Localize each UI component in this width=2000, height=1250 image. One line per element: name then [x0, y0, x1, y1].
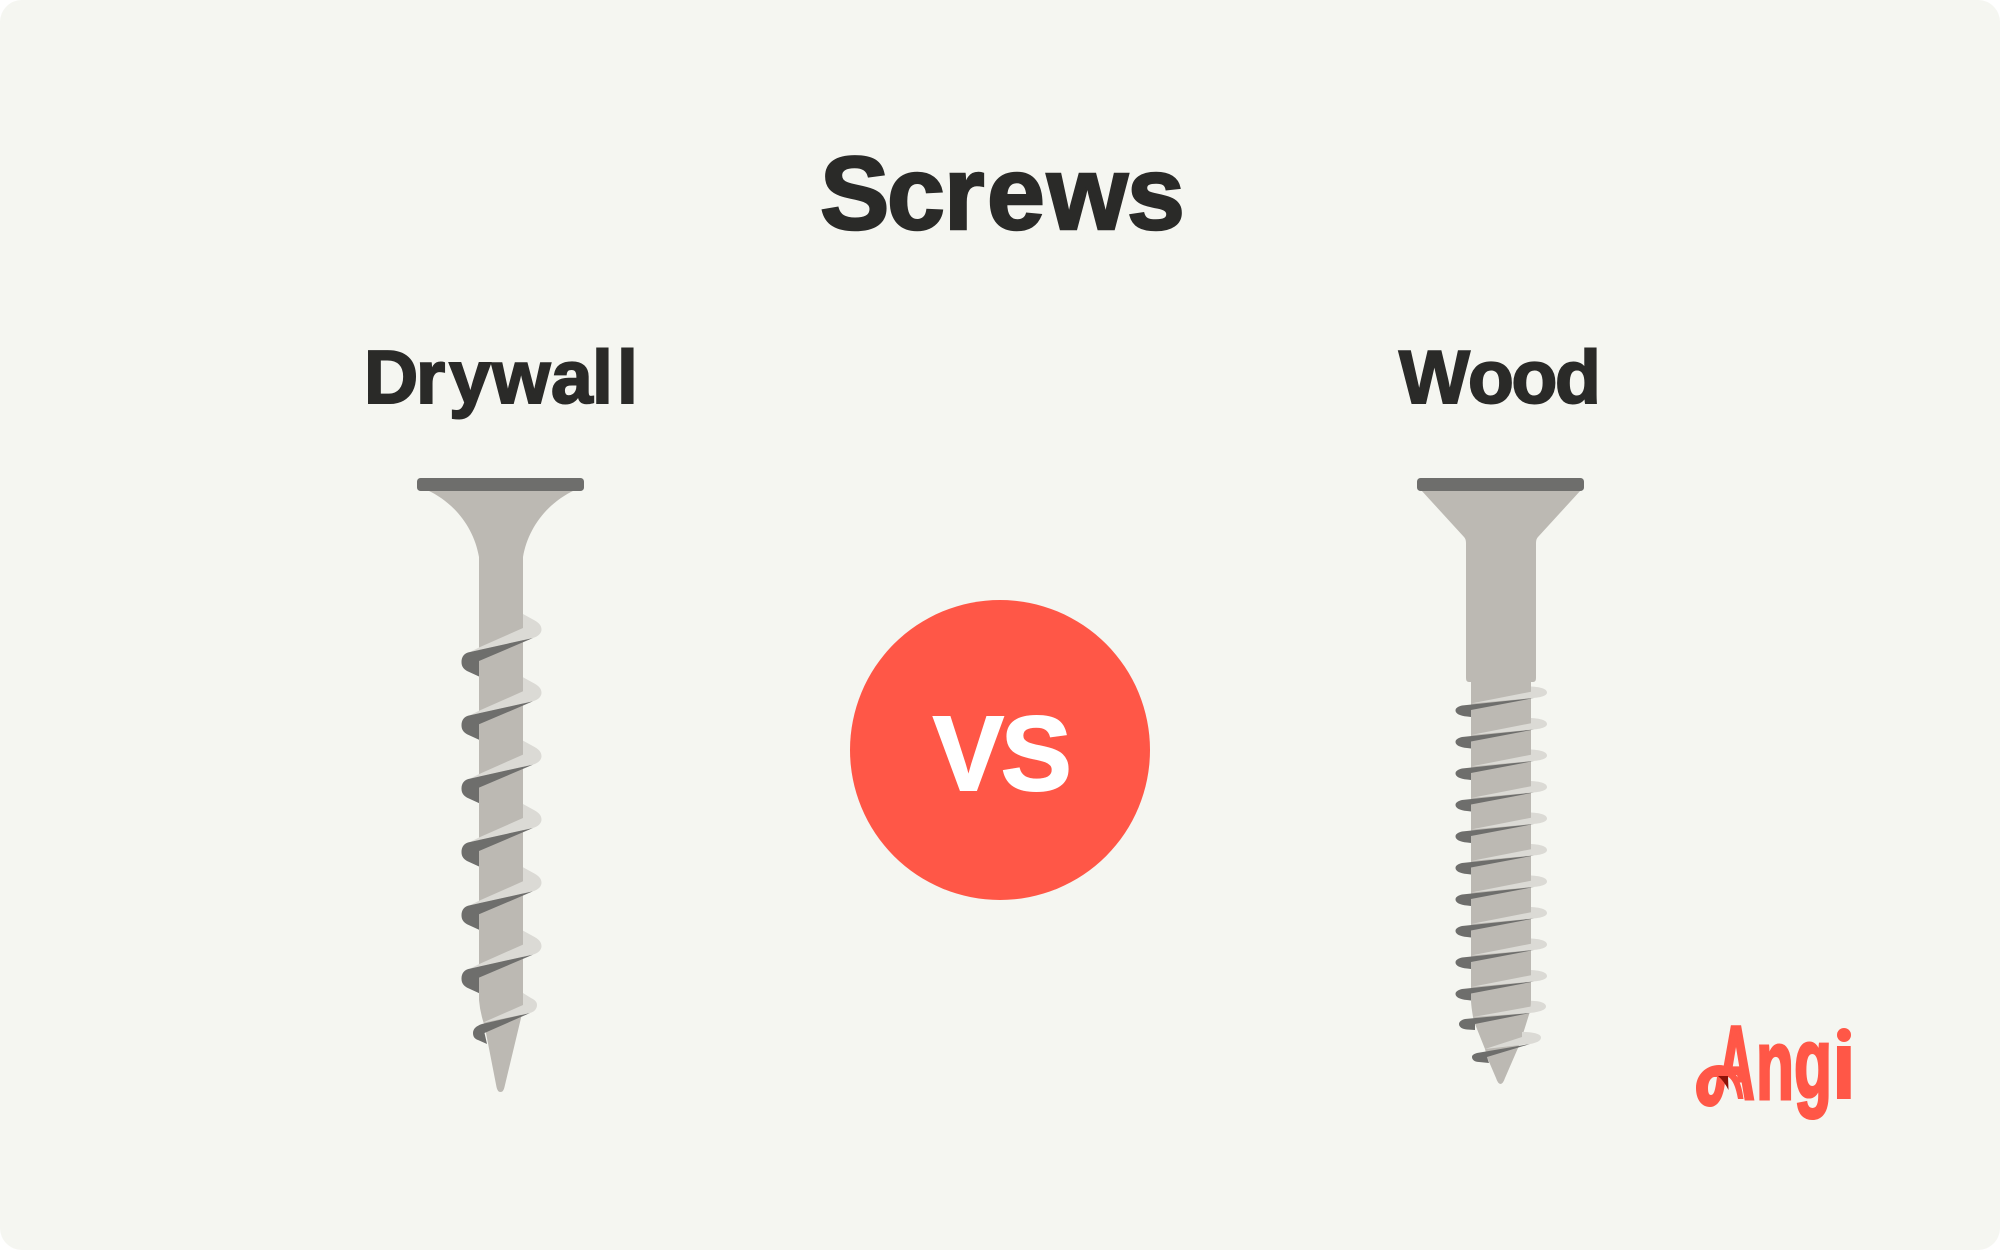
- logo: Angi: g: [1794, 1007, 1832, 1119]
- icon: wood screw: [1417, 478, 1584, 1084]
- vs badge: [850, 600, 1150, 900]
- title: Screws: [820, 136, 1185, 252]
- heading: wood: Wood: [1399, 335, 1601, 419]
- icon: drywall screw: [417, 478, 584, 1092]
- vs badge: VS: [933, 695, 1072, 813]
- logo: Angi: A: [1718, 1006, 1754, 1120]
- logo: Angi: n: [1756, 1009, 1794, 1121]
- logo: Angi: i: [1830, 1009, 1858, 1121]
- heading: drywall: Drywall: [364, 335, 638, 419]
- logo: Angi: [1696, 1025, 1851, 1120]
